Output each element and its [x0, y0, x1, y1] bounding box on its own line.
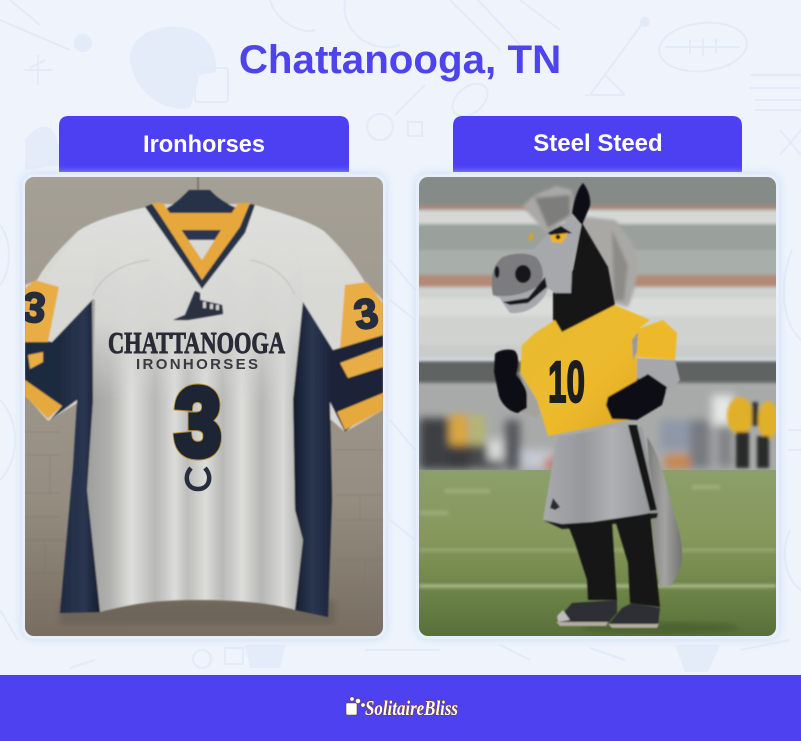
- label tab: Steel Steed: [453, 116, 742, 172]
- nostrils: [515, 265, 531, 283]
- horseshoe logo: [187, 468, 209, 489]
- collar gold: [152, 203, 250, 280]
- left sleeve cuff: [25, 380, 62, 419]
- left sleeve gold patch: [25, 280, 59, 342]
- sleeve numbers: [25, 292, 378, 330]
- right shoe: [608, 603, 660, 625]
- jersey: [520, 305, 650, 436]
- jersey wordmark: IRONHORSES: [136, 356, 258, 373]
- left sleeve gold stripe: [28, 352, 43, 369]
- footer bar: [0, 675, 801, 741]
- field lines: [419, 487, 776, 586]
- label tab: Ironhorses: [59, 116, 349, 172]
- neck: [553, 223, 615, 333]
- jersey body: [86, 298, 304, 613]
- label tab: Ironhorses: Ironhorses: [143, 132, 265, 158]
- logo: SolitaireBliss: SolitaireBliss: [365, 696, 458, 720]
- background players in yellow: [727, 397, 778, 468]
- eye: [550, 233, 568, 243]
- ear: [572, 183, 590, 225]
- sleeve numbers: 3: [350, 289, 382, 339]
- field: [419, 470, 776, 636]
- inner collar band: [167, 213, 234, 230]
- right sleeve cuff: [337, 393, 383, 430]
- right sleeve gold stripe: [340, 347, 383, 378]
- left arm sleeve: [518, 372, 547, 418]
- locomotive logo: [173, 291, 223, 320]
- shorts stripe: [628, 425, 657, 511]
- right leg: [615, 513, 660, 607]
- right sleeve gold patch: [340, 282, 383, 348]
- logo icon: cards: [346, 697, 365, 715]
- right side panel: [293, 302, 383, 617]
- photo: jersey on brick wall: [20, 177, 383, 636]
- hanger hook: [197, 177, 199, 192]
- left leg: [568, 522, 617, 600]
- mascot shadow: [580, 622, 740, 634]
- photo: mascot on field: [415, 173, 780, 636]
- blurred crowd: [419, 395, 734, 470]
- left shoe: [557, 600, 617, 625]
- panel: Steel Steed: [415, 116, 780, 640]
- label tab: Steel Steed: Steel Steed: [533, 130, 663, 157]
- left glove: [494, 350, 527, 413]
- photo frame: [21, 173, 387, 640]
- jersey: [25, 177, 383, 617]
- snout: [492, 254, 543, 296]
- jersey right sleeve: [302, 233, 383, 432]
- collar navy trim: [145, 204, 255, 289]
- right arm: [606, 374, 667, 420]
- back collar: [163, 203, 238, 210]
- mascot number 10: 10: [548, 350, 585, 415]
- shorts: [543, 425, 658, 525]
- far eye: [528, 232, 533, 241]
- jersey wordmark: CHATTANOOGA: [108, 325, 285, 360]
- jersey number 3: 3: [175, 369, 221, 476]
- stadium background: [415, 173, 780, 473]
- eye brow: [548, 226, 572, 237]
- mane: [523, 186, 638, 307]
- head: [492, 218, 581, 313]
- mascot: [492, 183, 682, 628]
- hanger: [167, 190, 237, 213]
- jersey number 3: 3: [175, 369, 221, 476]
- jersey shoulder: [635, 320, 677, 360]
- shorts logo: [550, 498, 560, 510]
- brick wall courses: [25, 432, 383, 625]
- right upper sleeve: [635, 358, 680, 393]
- left side panel: [25, 300, 100, 613]
- photo frame: [415, 173, 780, 640]
- jersey yoke: [92, 205, 304, 386]
- hem shadow: [60, 600, 335, 624]
- tail: [647, 437, 682, 587]
- sleeve numbers: 3: [20, 283, 48, 332]
- title: Chattanooga, TN: [239, 37, 561, 82]
- jersey wordmark: [108, 332, 286, 369]
- jersey left sleeve: [25, 232, 93, 422]
- logo: SolitaireBliss: [346, 696, 458, 720]
- jersey number 3: [172, 384, 222, 460]
- mouth: [503, 277, 547, 305]
- panel: Ironhorses: [20, 116, 387, 640]
